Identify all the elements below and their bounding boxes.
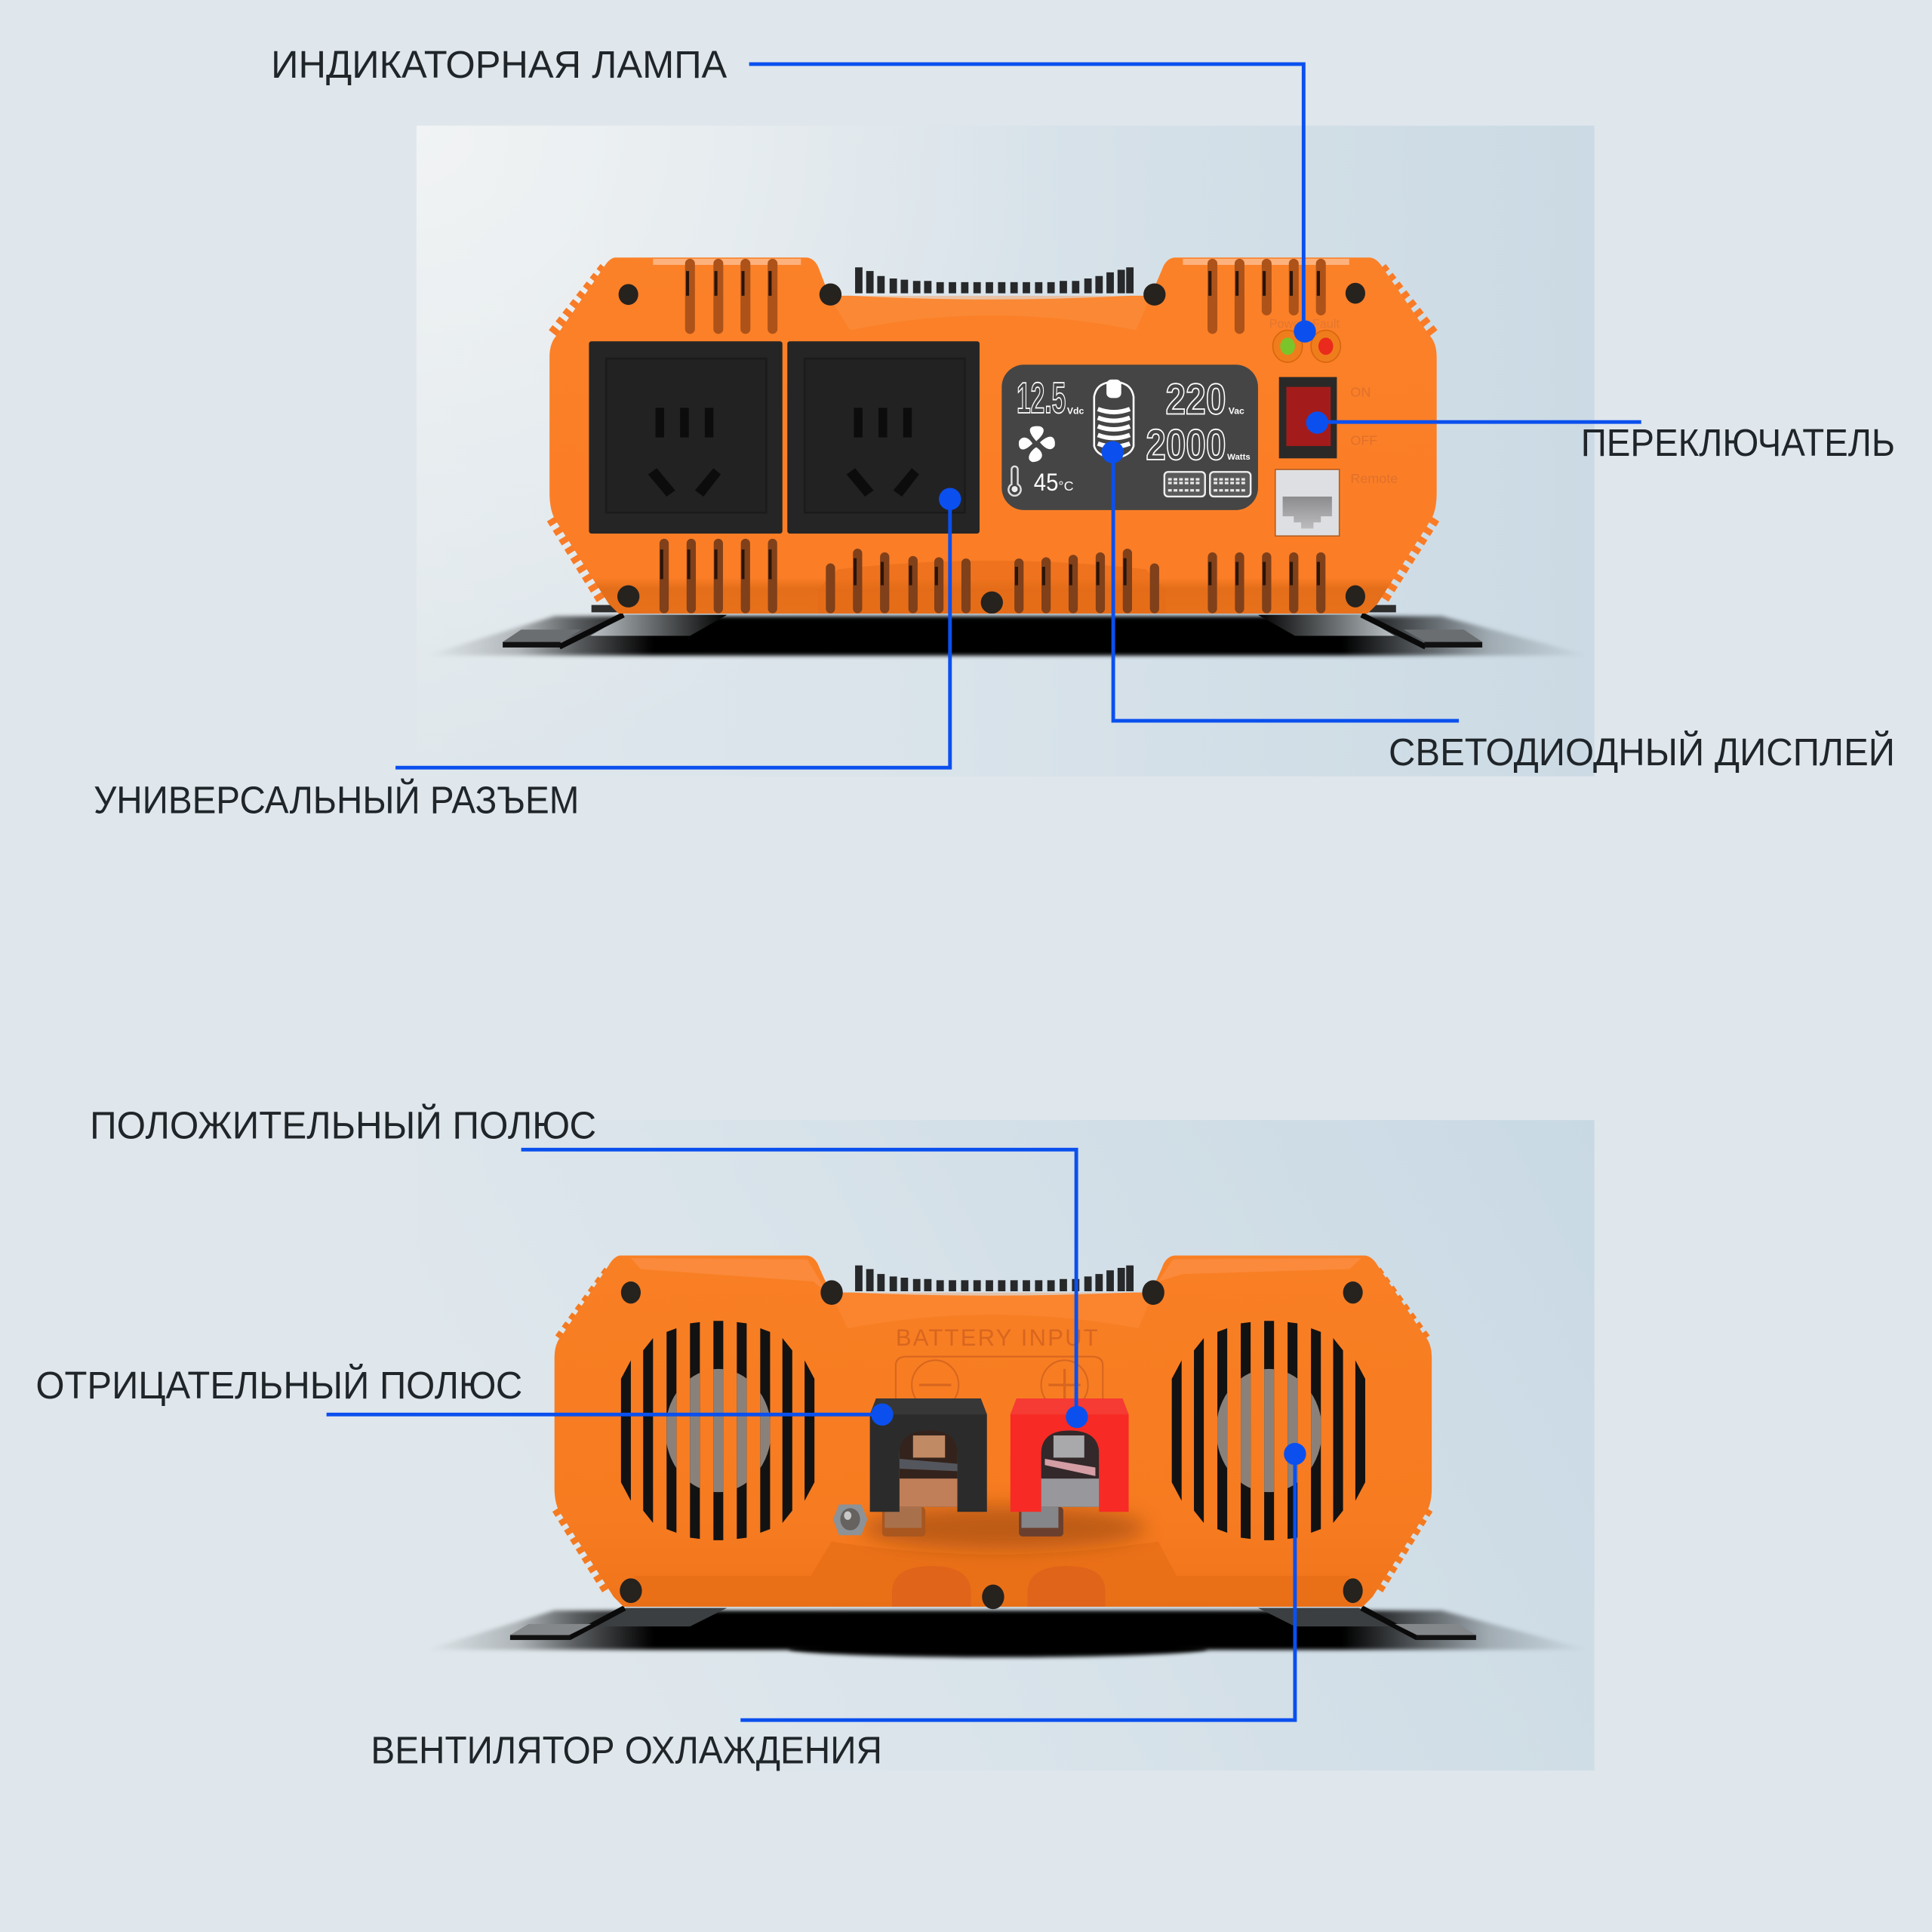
label: ПОЛОЖИТЕЛЬНЫЙ ПОЛЮС (90, 1104, 596, 1147)
switch labels: ON (1350, 385, 1371, 400)
AC socket right (787, 341, 980, 534)
housing screws (617, 283, 1365, 614)
LCD display: °C (1058, 478, 1074, 494)
anchor dot (1294, 320, 1316, 343)
callout: cooling fan (371, 1443, 1306, 1771)
ground shadow (425, 616, 1589, 656)
callout: LED display (1102, 441, 1895, 774)
negative terminal (870, 1398, 987, 1537)
LCD display: Watts (1227, 453, 1251, 462)
cable bumps (892, 1566, 1105, 1607)
grounding nut (833, 1504, 867, 1535)
RJ45 remote port (1275, 469, 1340, 536)
leader line (1113, 452, 1459, 721)
mounting feet (503, 605, 1482, 648)
orange housing (555, 1256, 1432, 1607)
leader line (740, 1454, 1295, 1720)
battery input marking: BATTERY INPUT (896, 1324, 1098, 1351)
label: ИНДИКАТОРНАЯ ЛАМПА (271, 43, 728, 86)
thermometer icon (1008, 466, 1021, 496)
top facets (631, 1258, 1361, 1294)
LCD display: Vac (1229, 406, 1244, 417)
anchor dot (1102, 441, 1124, 463)
callout: negative pole (35, 1364, 894, 1426)
vent slots (662, 263, 1321, 609)
lower centre recess (626, 1541, 1361, 1607)
top edge light strips (653, 259, 1349, 265)
panel: rear view backdrop (417, 1120, 1595, 1770)
serrated edges (558, 1272, 1427, 1592)
indicator labels: Power (1269, 317, 1304, 331)
status icon: input (1210, 472, 1251, 497)
label: ОТРИЦАТЕЛЬНЫЙ ПОЛЮС (35, 1364, 522, 1407)
anchor dot (939, 488, 961, 510)
leader line (1317, 421, 1641, 423)
LCD display: 45 (1034, 468, 1058, 496)
serrated edges (553, 269, 1433, 601)
callout: indicator lamp (271, 43, 1316, 343)
AC socket left (589, 341, 783, 534)
housing highlight (828, 296, 1151, 331)
inverter rear view (425, 1256, 1589, 1657)
orange housing (549, 257, 1437, 614)
battery icon (1094, 380, 1134, 458)
red LED (1311, 331, 1340, 362)
status icon: output (1164, 472, 1205, 497)
mounting feet (510, 1608, 1476, 1657)
switch labels (1350, 385, 1398, 486)
callout: positive pole (90, 1104, 1088, 1428)
switch labels: Remote (1350, 471, 1398, 486)
indicator labels (1269, 317, 1340, 331)
label: ВЕНТИЛЯТОР ОХЛАЖДЕНИЯ (371, 1728, 882, 1771)
leader line (521, 1149, 1076, 1417)
cooling fan left (621, 1321, 814, 1540)
terminal cast shadow (863, 1506, 1146, 1550)
panel: front view backdrop (417, 126, 1595, 777)
positive terminal (1011, 1398, 1129, 1537)
inverter front view (425, 257, 1589, 656)
anchor dot (871, 1404, 894, 1426)
LCD display: 220 (1165, 376, 1226, 424)
LCD display: Vdc (1067, 406, 1084, 417)
readings: 12.5 (1017, 374, 1066, 423)
fan icon (1019, 426, 1055, 462)
callout: universal socket (94, 488, 961, 822)
leader line (327, 1414, 882, 1416)
anchor dot (1066, 1406, 1088, 1428)
label: УНИВЕРСАЛЬНЫЙ РАЗЪЕМ (94, 779, 579, 822)
anchor dot (1284, 1443, 1306, 1465)
leader line (749, 64, 1303, 331)
indicator labels: Fault (1312, 317, 1340, 331)
cooling fins (859, 267, 1130, 294)
switch labels: OFF (1350, 432, 1377, 448)
cooling fan right (1172, 1321, 1365, 1540)
label: ПЕРЕКЛЮЧАТЕЛЬ (1581, 421, 1895, 464)
anchor dot (1306, 411, 1328, 434)
callout: switch (1306, 411, 1895, 464)
lower centre recess (818, 561, 1165, 614)
power switch (1279, 377, 1337, 458)
label: СВЕТОДИОДНЫЙ ДИСПЛЕЙ (1389, 731, 1895, 774)
cooling fins (859, 1266, 1130, 1291)
LCD display: 2000 (1146, 421, 1226, 469)
centre panel highlight (830, 1293, 1153, 1328)
LCD display (1001, 365, 1258, 510)
battery input marking (896, 1324, 1103, 1410)
ground shadow (425, 1611, 1589, 1650)
housing screws (620, 1280, 1363, 1609)
leader line (395, 499, 950, 768)
green LED (1273, 331, 1303, 362)
